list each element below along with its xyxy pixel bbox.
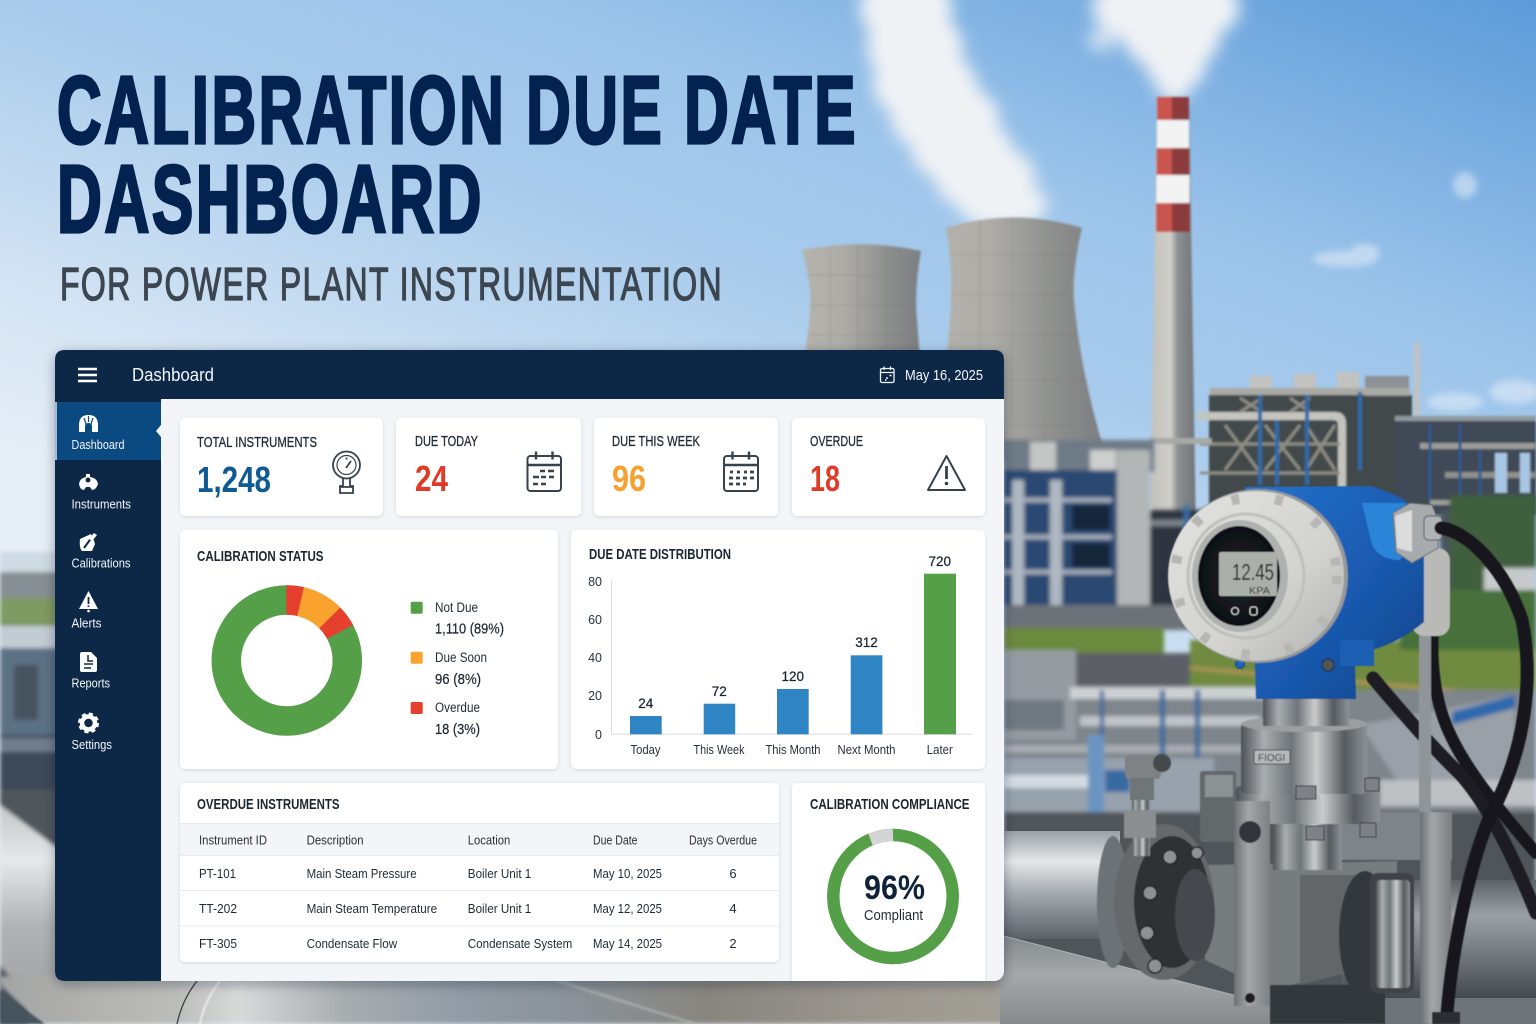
nav: instruments	[72, 474, 131, 512]
card: total instruments: 1,248	[197, 459, 271, 500]
bar chart: 720	[929, 554, 951, 569]
legend: Overdue	[435, 700, 480, 715]
nav: reports: Reports	[72, 676, 110, 690]
card: overdue	[792, 418, 985, 516]
table row: FT-305: Condensate System	[468, 936, 572, 951]
conduit nut	[1393, 503, 1438, 563]
pressure transmitter	[1097, 486, 1536, 1024]
table row: PT-101	[199, 866, 737, 881]
table row: PT-101: May 10, 2025	[593, 866, 662, 881]
legend: 18 (3%)	[435, 722, 480, 738]
table header: Description	[307, 834, 364, 848]
table row: FT-305: Condensate Flow	[307, 936, 398, 951]
table row: PT-101: PT-101	[199, 866, 236, 881]
legend: Not Due	[435, 600, 478, 615]
top bar title: Dashboard	[132, 365, 214, 385]
steam plumes	[860, 0, 1240, 229]
bar chart	[588, 554, 972, 757]
table row: TT-202: Main Steam Temperature	[307, 901, 437, 916]
side valve and bracket	[1200, 771, 1236, 842]
nav: settings	[72, 714, 112, 752]
panel: calibration compliance: CALIBRATION COMPLIANCE	[810, 796, 970, 813]
table row: TT-202: May 12, 2025	[593, 901, 662, 916]
panel: calibration compliance	[792, 783, 985, 981]
table row: TT-202: Boiler Unit 1	[468, 901, 531, 916]
table row: FT-305: 2	[729, 936, 737, 951]
clouds	[1313, 172, 1536, 411]
table row: PT-101: Boiler Unit 1	[468, 866, 531, 881]
nav: instruments: Instruments	[72, 498, 131, 512]
bar chart: 72	[712, 684, 727, 699]
title	[57, 57, 858, 253]
table header	[180, 823, 779, 856]
main conduit cable	[1441, 528, 1527, 1012]
table row: FT-305: FT-305	[199, 936, 237, 951]
nav: alerts: Alerts	[72, 616, 102, 630]
table header: Location	[468, 834, 510, 848]
bar chart: This Month	[766, 743, 821, 757]
card: total instruments	[180, 418, 383, 516]
bar chart: This Week	[694, 743, 745, 757]
table row: TT-202: TT-202	[199, 901, 237, 916]
icon: pressure gauge	[333, 452, 360, 493]
rear white cap	[1412, 548, 1450, 636]
icon: calendar	[880, 366, 894, 382]
card: overdue: 18	[810, 458, 840, 499]
bar chart: 80	[588, 575, 602, 589]
bar chart: 0	[595, 728, 602, 742]
legend: 1,110 (89%)	[435, 622, 504, 638]
table header: Instrument ID	[199, 834, 267, 848]
panel: due date distribution: DUE DATE DISTRIBUTION	[589, 546, 731, 563]
table row: FT-305	[199, 936, 737, 951]
dashboard panel	[55, 350, 1004, 981]
white ring cover	[1168, 489, 1348, 663]
table header: Due Date	[593, 834, 638, 848]
top bar	[55, 350, 1004, 399]
cooling tower right	[930, 216, 1104, 470]
active nav item	[55, 402, 161, 460]
bottom pipes strip	[0, 976, 1040, 1024]
title: CALIBRATION DUE DATE	[57, 57, 858, 164]
mounting pole and plate	[1419, 630, 1431, 820]
card: due today	[396, 418, 581, 516]
icon: warning triangle	[928, 456, 965, 490]
card: overdue: OVERDUE	[810, 433, 863, 450]
table row: FT-305: May 14, 2025	[593, 936, 662, 951]
panel: calibration status	[180, 530, 558, 769]
table row: TT-202	[199, 901, 737, 916]
LCD display	[1219, 552, 1277, 615]
legend: 96 (8%)	[435, 672, 481, 688]
mid ground	[1004, 440, 1536, 1024]
panel: overdue instruments table	[180, 783, 779, 962]
bar chart: Next Month	[838, 743, 896, 757]
card: total instruments: TOTAL INSTRUMENTS	[197, 434, 317, 451]
manifold block	[1205, 861, 1397, 990]
legend	[411, 600, 504, 738]
left flange	[1097, 836, 1129, 968]
compliance ring	[833, 835, 953, 958]
card: due today: DUE TODAY	[415, 433, 478, 450]
stainless neck and drum	[1273, 820, 1342, 870]
card: due today: 24	[415, 458, 448, 499]
nav: dashboard	[72, 415, 125, 452]
table row: TT-202: 4	[729, 901, 737, 916]
bar chart: 20	[588, 689, 602, 703]
icon: calendar	[724, 452, 758, 491]
table row: PT-101: Main Steam Pressure	[307, 866, 417, 881]
cables behind	[1373, 600, 1536, 913]
bar chart: 312	[855, 635, 878, 650]
bar chart: 60	[588, 613, 602, 627]
nav: calibrations: Calibrations	[72, 557, 130, 571]
chimney	[1150, 97, 1212, 540]
icon: menu	[78, 369, 97, 381]
bar chart: Later	[927, 743, 953, 757]
legend: Due Soon	[435, 650, 487, 665]
nav: alerts	[72, 591, 102, 630]
nav: dashboard: Dashboard	[72, 438, 125, 452]
bar chart: 40	[588, 651, 602, 665]
card: due this week: 96	[612, 458, 646, 499]
table header: Days Overdue	[689, 834, 757, 848]
small valve	[1124, 754, 1171, 856]
LCD display: 12.45	[1232, 559, 1274, 585]
right coupling	[1339, 871, 1391, 999]
pressure transmitter: FIOGI	[1258, 753, 1285, 764]
blue housing	[1245, 486, 1424, 699]
cooling tower left	[802, 244, 921, 360]
card: due this week: DUE THIS WEEK	[612, 433, 700, 450]
nav: settings: Settings	[72, 738, 112, 752]
nav: reports	[72, 652, 110, 690]
compliance value: 96%	[864, 869, 925, 907]
bar chart: Today	[630, 743, 661, 757]
panel: calibration status: CALIBRATION STATUS	[197, 548, 324, 565]
panel: calibration compliance: Compliant	[864, 908, 923, 924]
sidebar	[55, 399, 161, 981]
icon: calendar	[528, 452, 561, 491]
panel: overdue instruments table: OVERDUE INSTRUMENTS	[197, 796, 340, 813]
title: DASHBOARD	[57, 146, 484, 253]
LCD display: KPA	[1249, 586, 1270, 597]
bar chart: 120	[782, 669, 804, 684]
nav: calibrations	[72, 533, 130, 571]
date: May 16, 2025	[905, 368, 983, 384]
bar chart: 24	[638, 696, 654, 711]
table row: PT-101: 6	[729, 866, 737, 881]
left side landscape	[0, 552, 60, 1024]
donut chart	[201, 575, 372, 746]
panel: due date distribution	[571, 530, 985, 769]
distant plant structures	[1184, 343, 1536, 520]
LCD bezel	[1198, 526, 1280, 626]
subtitle: FOR POWER PLANT INSTRUMENTATION	[60, 258, 723, 310]
card: due this week	[594, 418, 778, 516]
foreground pipes	[1000, 831, 1536, 1024]
